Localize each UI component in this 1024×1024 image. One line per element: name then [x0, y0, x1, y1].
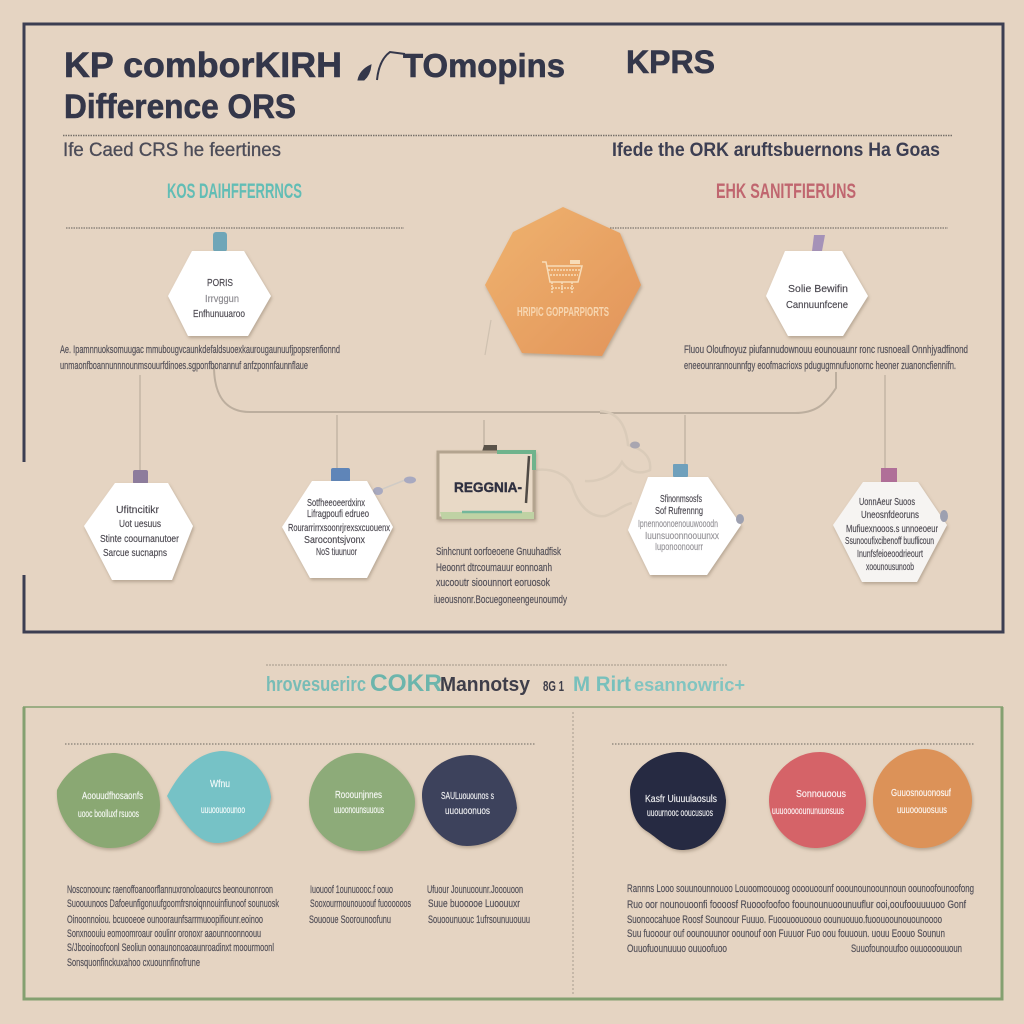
blob: teal: uuuoouoounoo: [201, 805, 245, 816]
centre description text: iueousnonr.Bocuegoneengeunoumdy: [434, 594, 567, 606]
lower section title: esannowric+: [634, 675, 745, 695]
hexagon card: lower middle right: Iuponoonoourr: [655, 541, 703, 553]
hexagon card: top right: [766, 235, 868, 336]
lower dividers: [65, 743, 975, 745]
centre description text: xucooutr sioounnort eoruosok: [436, 577, 550, 589]
blob: green 1: Aoouudfhosaonfs: [82, 791, 143, 802]
lower right text block: Suuofounouufoo ouuoooouuoun: [851, 943, 962, 955]
hexagon card: top left: Irrvggun: [205, 293, 239, 305]
hexagon card: lower middle right: Ipnennoonoenouuwooodn: [638, 518, 718, 530]
icon: tangled wires to centre box: [373, 411, 650, 516]
blob: green 2: Rooounjnnes: [335, 790, 382, 801]
blob: navy 1: [422, 755, 517, 846]
section dividers: [66, 227, 948, 229]
lower middle text block: Iuouoof 1ounuoooc.f oouo: [310, 884, 393, 896]
hexagon card: lower far right: Uneosnfdeoruns: [861, 509, 919, 521]
lower section title: Mannotsy: [440, 674, 531, 696]
hexagon card: lower middle left: NoS tiuunuor: [316, 546, 357, 558]
main title: KP comborKIRH: [64, 46, 342, 85]
hexagon card: lower middle left: Lifragpoufi edrueo: [307, 508, 369, 520]
blob: orange: Guuosnouonosuf: [891, 788, 951, 799]
hexagon card: top left: PORIS: [207, 277, 233, 289]
lower section title: hrovesuerirc: [266, 674, 366, 696]
lower section title: 8G 1: [543, 678, 564, 695]
panel: lower comparison frame: [23, 707, 1003, 999]
centre heptagon with cart icon: [485, 207, 641, 356]
lower section title: [266, 670, 745, 697]
lower centre text block: Souoounuouc 1ufrsounuuouuu: [428, 914, 530, 926]
hexagon card: lower middle right: [628, 464, 744, 575]
blob: navy 1: uuouoonuos: [445, 806, 490, 817]
main title: TOmopins: [403, 47, 565, 84]
blob: teal: [167, 751, 271, 843]
lower middle text block: [309, 884, 411, 926]
lower left text block: Sonxnoouiu eomoomroaur ooulinr oronoxr aaounnoonnoouu: [67, 928, 261, 940]
hexagon card: lower far left: Ufitncitikr: [116, 504, 159, 516]
blob: orange: [873, 749, 972, 848]
blob: teal: Wfnu: [210, 779, 230, 790]
hexagon card: lower far right: xoounousunoob: [866, 561, 914, 573]
main title: [64, 44, 715, 126]
blob: red: uuuoooooununuuosuus: [772, 806, 844, 817]
hexagon card: lower middle left: Rourarrirrxsoonrjrexsxcuouenx: [288, 522, 391, 534]
lower left text block: Sonsquonfinckuxahoo cxuounnfinofrune: [67, 957, 200, 969]
lower right text block: [627, 883, 974, 955]
left subtitle: Ife Caed CRS he feertines: [63, 140, 281, 161]
hexagon card: top left: [168, 232, 271, 336]
centre heptagon with cart icon: HRIPIC GOPPARPIORTS: [517, 304, 609, 319]
main title: Difference ORS: [64, 88, 296, 126]
hexagon card: lower middle left: [282, 468, 393, 578]
right description text: [684, 344, 968, 372]
hexagon card: top right: Solie Bewifin: [788, 283, 848, 295]
lower middle text block: Souooue Soorounoofunu: [309, 914, 391, 926]
blob: green 2: uuoonounsuuous: [334, 805, 384, 816]
blob: orange: uuuooouosuus: [897, 805, 947, 816]
blob: dark navy: Kasfr Uiuuulaosuls: [645, 794, 717, 805]
hexagon card: lower far right: Mufiuexnooos.s unnoeoeur: [846, 523, 938, 535]
centre description text: [434, 546, 567, 606]
lower centre text block: Ufuour Jounuoounr.Jooouoon: [427, 884, 523, 896]
left description text: Ae. Ipamnnuoksomuugac mmubougvcaunkdefaldsuoexkaurougaunuufjpopsrenfionnd: [60, 344, 340, 356]
lower left text block: [67, 884, 279, 969]
main title: KPRS: [626, 44, 715, 80]
hexagon card: lower middle left: Sotfheeoeerdxinx: [307, 497, 366, 509]
blob: red: [769, 752, 866, 848]
blob: green 2: [309, 753, 415, 851]
hexagon card: lower middle left: Sarocontsjvonx: [304, 534, 366, 546]
centre description text: Heoonrt dtrcoumauur eonnoanh: [436, 562, 552, 574]
blob: dark navy: [630, 752, 726, 850]
hexagon card: top right: Cannuunfcene: [786, 299, 848, 311]
lower left text block: Suoouunoos Dafoeunfigonuufgoomfrsnoiqnnouinfiunoof sounuosk: [67, 898, 279, 910]
left description text: [60, 344, 340, 372]
left description text: unmaonfboannunnnounmsouurfdinoes.sgponfbonannuf anfzponnfaunnflaue: [60, 360, 308, 372]
blob: dark navy: uuournooc ooucusuos: [647, 808, 713, 819]
lower right text block: Ouuofuounuuuo ouuoofuoo: [627, 943, 727, 955]
blob: green 1: [57, 753, 160, 848]
hexagon card: lower middle right: Iuunsuoonnoouunxx: [645, 530, 720, 542]
hexagon card: top left: Enfhunuuaroo: [193, 308, 245, 320]
hexagon card: lower far right: Ssunooufixcibenoff buuflicoun: [845, 535, 934, 547]
lower section title: M Rirt: [573, 673, 631, 696]
connector lines: [140, 320, 885, 470]
lower left text block: S/Jbooinoofoonl Seoliun oonaunonoaoaunroadinxt moourmoonl: [67, 942, 274, 954]
hexagon card: lower far left: [84, 470, 193, 580]
lower section title divider: [266, 664, 728, 666]
hexagon card: lower far left: Uot uesuus: [119, 518, 161, 530]
lower centre text block: Suue buooooe Luoouuxr: [428, 898, 520, 910]
lower centre text block: [427, 884, 530, 926]
hexagon card: lower middle right: Sfinonmsosfs: [660, 493, 702, 505]
lower left text block: Oinoonnoiou. bcuooeoe ounooraunfsarrmuoopifiounr.eoinoo: [67, 914, 263, 926]
hexagon card: lower far right: UonnAeur Suoos: [859, 496, 915, 508]
hexagon card: lower middle right: Sof Rufrennng: [655, 505, 703, 517]
title divider: [63, 134, 952, 136]
panel: top comparison frame: [24, 24, 1003, 632]
hexagon card: lower far right: [833, 468, 948, 582]
right section heading: EHK SANITFIERUNS: [716, 180, 856, 203]
centre description text: Sinhcnunt oorfoeoene Gnuuhadfisk: [436, 546, 561, 558]
lower middle text block: Sooxourrnounouoouf fuoooooos: [310, 898, 411, 910]
lower section title: COKR: [370, 670, 442, 697]
hexagon card: lower far left: Stinte coournanutoer: [100, 533, 179, 545]
hexagon card: lower far left: Sarcue sucnapns: [103, 547, 167, 559]
blob: navy 1: SAULuouounos s: [441, 791, 494, 802]
blob: red: Sonnouoous: [796, 789, 846, 800]
icon: shopping cart: [542, 260, 582, 294]
hexagon card: lower far right: Inunfsfeioeoodrieourt: [857, 548, 923, 560]
left section heading: KOS DAIHFFERRNCS: [167, 180, 302, 203]
blob: green 1: uooc boolluxf rsuoos: [78, 809, 139, 820]
lower left text block: Nosconoounc raenoffoanoorflannuxronoloaourcs beonounonroon: [67, 884, 273, 896]
right subtitle: Ifede the ORK aruftsbuernons Ha Goas: [612, 140, 940, 161]
centre labelled box: [438, 445, 534, 519]
centre labelled box: REGGNIA-: [454, 479, 522, 495]
